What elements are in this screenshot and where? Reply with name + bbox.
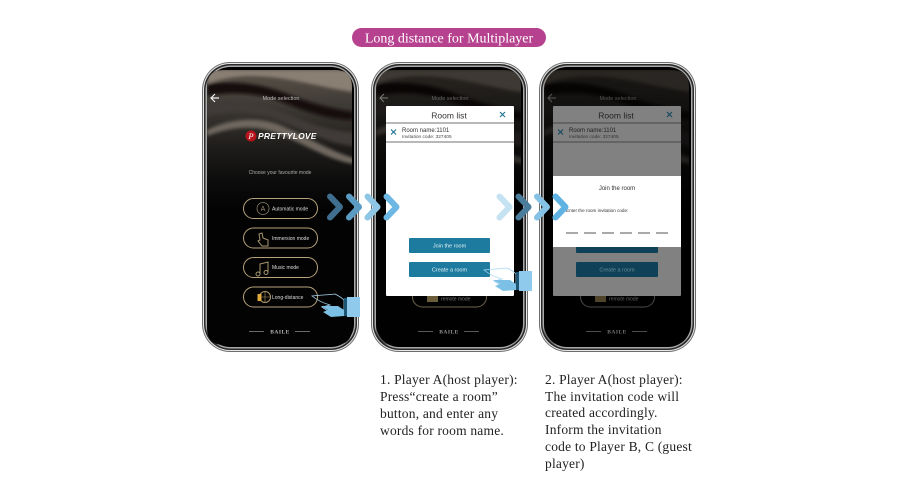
mode button: automatic [244,198,318,218]
mode button: music: Music mode [272,265,299,271]
dimmed room list modal [553,106,681,296]
dimmed create button [576,262,658,277]
create button [409,262,490,277]
screen title: Mode selection [432,96,468,102]
dimmed mode button: remote mode [609,296,639,302]
brand footer: BAILE [607,330,627,336]
room list modal: Room list [431,110,467,120]
mode button: long-distance [244,287,318,307]
dimmed mode button [412,287,486,307]
brand footer [586,330,647,336]
step 2 text: code to Player B, C (guest [545,439,692,454]
subtitle: Choose your favourite mode [249,170,312,176]
brand footer [249,330,310,336]
room list modal [386,106,514,296]
dimmed mode button: remote mode [441,296,471,302]
pointing hand: long-distance [312,294,360,317]
title pill [352,28,546,47]
screen title: Mode selection [600,96,636,102]
back arrow [548,94,556,102]
brand logo: P [247,131,254,141]
dimmed room list modal: Invitation code: 327405 [569,134,619,140]
join button: Join the room [433,244,467,250]
brand logo: PRETTYLOVE [258,131,317,141]
screen title: Mode selection [262,96,300,102]
back arrow [211,94,219,102]
dimmed room list modal: Room name:1101 [569,128,617,134]
mode button: automatic: A [261,206,266,213]
pointing hand: create a room [484,268,532,291]
create button: Create a room [432,268,467,274]
mode button: automatic: Automatic mode [272,206,308,212]
phone 2: room list [371,62,528,352]
phone 1: mode selection [202,62,359,352]
step 1 text: Press“create a room” [380,389,498,404]
dimmed create button: Create a room [599,268,635,274]
join button [409,238,490,253]
step 2 text: The invitation code will [545,389,679,404]
step 2 text: Inform the invitation [545,422,662,437]
join dialog [553,176,681,247]
back arrow [380,94,388,102]
step 2 text: player) [545,456,585,471]
title pill: Long distance for Multiplayer [365,32,534,46]
arrows: phone 2 to 3 [500,196,566,218]
join dialog: Enter the room invitation code: [566,208,628,213]
mode button: music [244,258,318,278]
room list modal: Room name:1101 [402,128,450,134]
dimmed room list modal: Room list [598,110,634,120]
phone 3: join the room [539,62,696,352]
mode button: immersion: Immersion mode [272,236,309,242]
step 2 text: created accordingly. [545,405,658,420]
dimmed mode button [580,287,654,307]
step 2 text: 2. Player A(host player): [545,372,683,387]
step 1 text: 1. Player A(host player): [380,372,518,387]
brand footer: BAILE [270,330,290,336]
arrows: phone 1 to 2 [330,196,396,218]
step 1 text: words for room name. [380,423,504,438]
brand footer [418,330,479,336]
mode button: long-distance: Long-distance [272,295,304,301]
brand footer: BAILE [439,330,459,336]
room list modal: Invitation code: 327405 [402,134,452,140]
join dialog: Join the room [599,186,635,192]
mode button: immersion [244,228,318,248]
step 1 text: button, and enter any [380,406,498,421]
